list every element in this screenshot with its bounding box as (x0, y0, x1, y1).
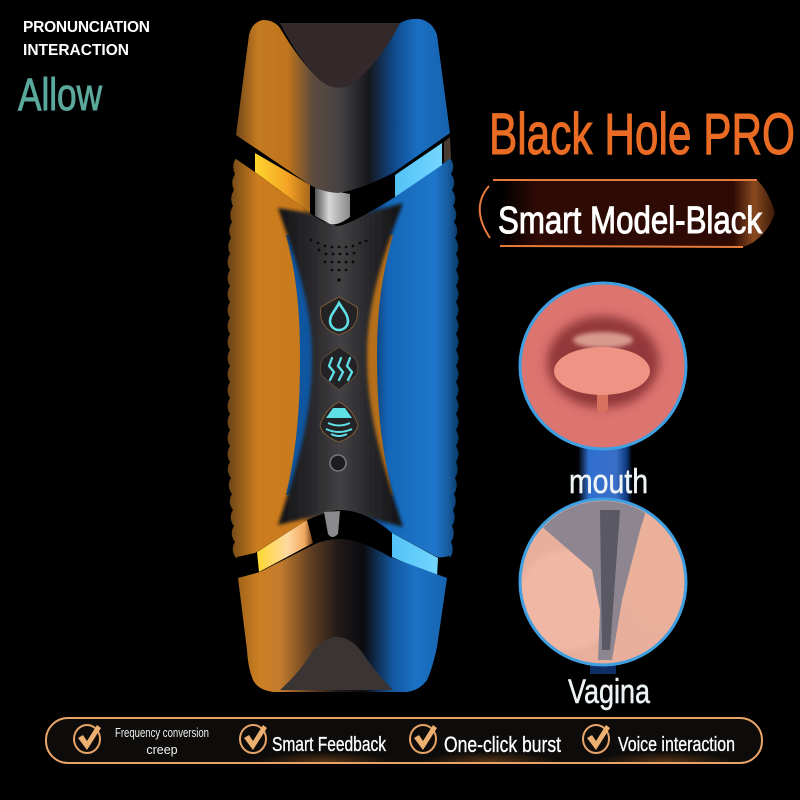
feature: one-click burst (410, 725, 561, 757)
header: pronunciation interaction: PRONUNCIATION (23, 19, 150, 36)
feature: frequency conversion creep: Frequency conversion (115, 726, 209, 740)
circle: mouth (520, 283, 686, 449)
circle: vagina (518, 498, 696, 674)
speaker holes (310, 239, 367, 282)
feature: frequency conversion creep (74, 725, 209, 757)
feature: voice interaction (583, 725, 735, 756)
power button (330, 455, 346, 471)
top cap (236, 19, 450, 193)
top band (233, 134, 452, 226)
icon: heat waves (320, 347, 358, 390)
device centre control panel (278, 203, 403, 527)
label: Vagina: Vagina (568, 673, 650, 711)
icon: sound (320, 402, 358, 442)
feature: one-click burst: One-click burst (444, 732, 561, 757)
header: pronunciation interaction: INTERACTION (23, 42, 129, 59)
blue column between circles (578, 446, 632, 504)
product device (228, 19, 458, 692)
feature bar (45, 717, 763, 764)
label: Allow: Allow (18, 69, 102, 120)
device inner strips (286, 235, 393, 495)
label: mouth: mouth (569, 463, 648, 501)
feature: voice interaction: Voice interaction (618, 734, 735, 756)
icon: water drop (320, 297, 358, 335)
feature: smart feedback (240, 725, 387, 756)
feature: frequency conversion creep: creep (146, 743, 178, 757)
device middle body (228, 158, 458, 558)
subtitle badge (477, 180, 775, 247)
feature: smart feedback: Smart Feedback (272, 734, 387, 756)
header: pronunciation interaction (23, 19, 150, 59)
bottom cap (238, 539, 447, 692)
bottom band (237, 510, 450, 578)
bar outline (46, 718, 762, 763)
